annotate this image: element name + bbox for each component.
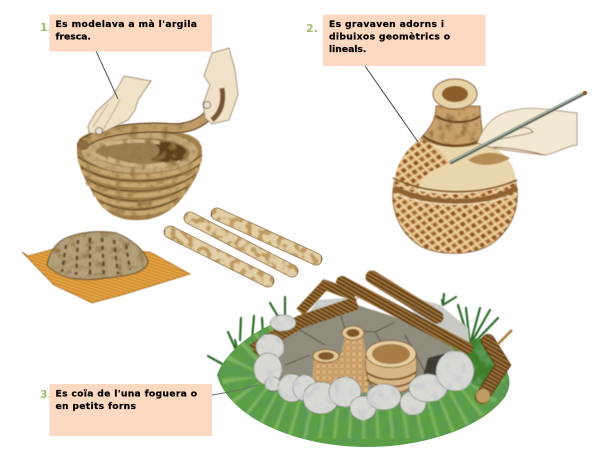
leader line 2 <box>365 66 418 142</box>
panel 2 <box>323 14 486 66</box>
jar neck <box>421 106 482 147</box>
clay coil being placed <box>84 107 215 143</box>
text 2: Es gravaven adorns i <box>329 19 444 30</box>
step 2 callout <box>306 14 486 66</box>
step 3 callout <box>40 384 212 436</box>
illustration: clay rolls <box>170 214 316 281</box>
grass ground <box>217 325 510 447</box>
leader line 3 <box>212 385 258 395</box>
back rocks <box>405 295 470 345</box>
roll 1 <box>170 232 268 281</box>
text 3: Es coïa de l'una foguera o <box>56 388 197 400</box>
number 3: 3. <box>40 388 52 401</box>
engraved zone <box>394 138 450 190</box>
number 1: 1. <box>40 21 52 34</box>
illustration: firing pit with pots <box>208 277 515 450</box>
roll 3 <box>217 214 316 259</box>
jar mouth <box>433 79 477 109</box>
text 1: Es modelava a mà l'argila <box>56 19 197 30</box>
clay mound <box>47 232 148 280</box>
text 1: fresca. <box>56 32 91 42</box>
leader line 1 <box>96 51 118 99</box>
illustration: clay mound on mat <box>22 232 190 303</box>
text 2: lineals. <box>329 44 366 55</box>
pit wall stones <box>270 305 456 396</box>
stick <box>450 93 585 163</box>
jar shoulder <box>394 138 516 194</box>
woven mat <box>22 248 190 303</box>
left roof logs <box>253 285 357 350</box>
tall pot <box>337 326 370 393</box>
jar bands <box>393 178 517 204</box>
right roof logs <box>342 277 467 348</box>
step 1 callout <box>40 14 212 52</box>
text 3: en petits forns <box>56 401 137 412</box>
illustration: coiled clay basket with hands <box>77 48 238 220</box>
right hand <box>203 48 238 124</box>
number 2: 2. <box>306 22 318 35</box>
illustration: decorated jar with hand and stick <box>393 79 587 253</box>
corner post <box>476 330 512 403</box>
text 2: dibuixos geomètrics o <box>329 32 450 42</box>
left hand <box>88 76 151 134</box>
jar lower band <box>393 180 517 253</box>
small pot <box>312 350 345 395</box>
worked area <box>468 153 510 165</box>
large pot <box>366 340 417 393</box>
green mound near post <box>463 338 495 386</box>
front stones <box>254 315 474 420</box>
panel 3 <box>50 384 212 436</box>
basket body <box>77 130 202 220</box>
roll 2 <box>190 218 292 271</box>
panel 1 <box>50 14 212 52</box>
grass tufts <box>208 294 498 365</box>
drawing hand <box>477 108 577 155</box>
